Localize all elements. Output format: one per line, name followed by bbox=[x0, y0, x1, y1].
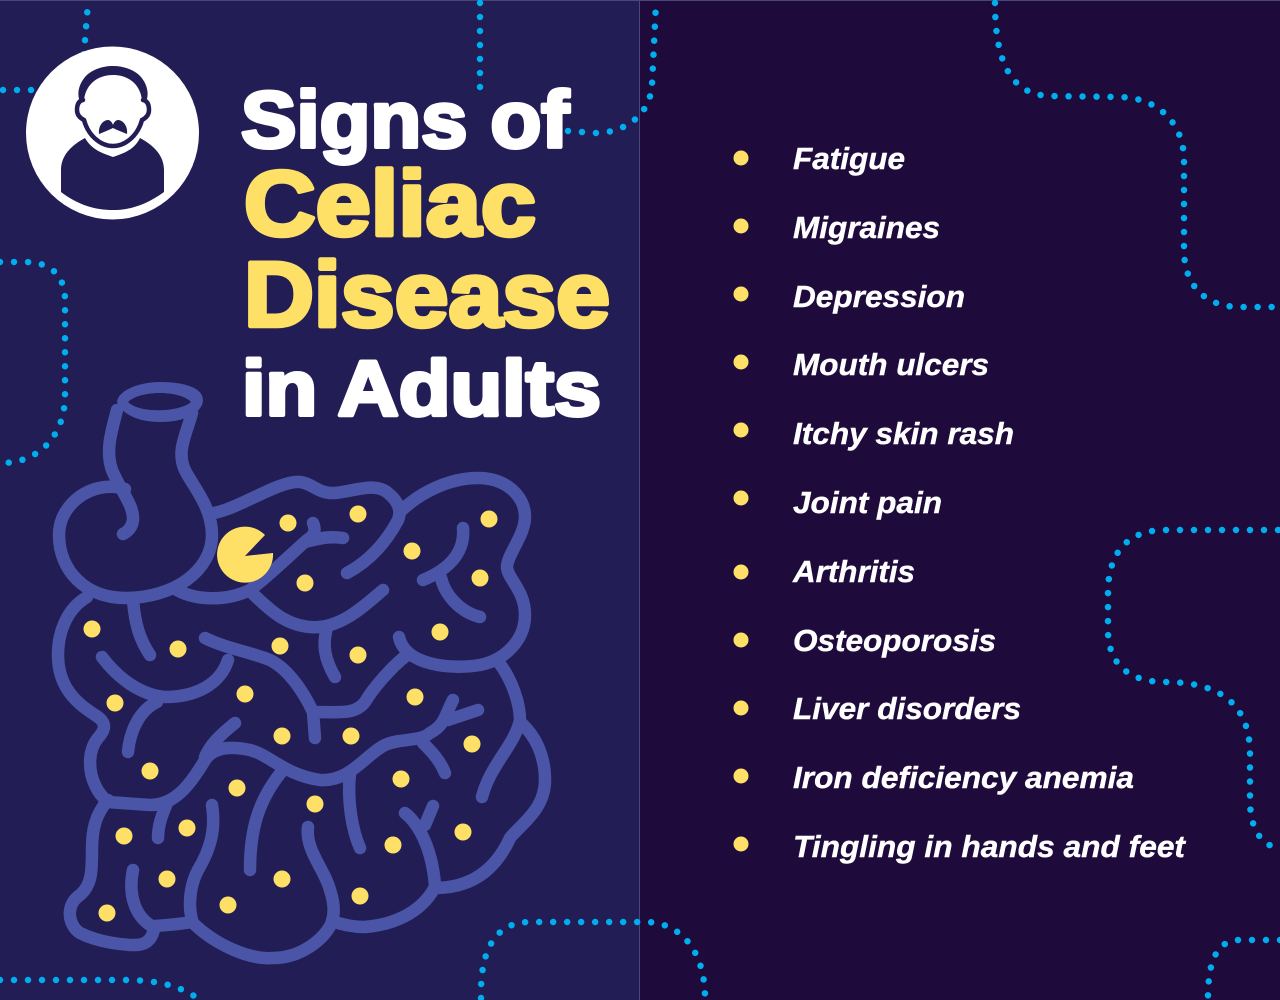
symptom list bbox=[734, 141, 1187, 864]
list item: Osteoporosis bbox=[793, 623, 996, 658]
title line: Disease: Disease bbox=[244, 244, 610, 346]
list bullets bbox=[734, 150, 748, 852]
title line: Signs of: Signs of bbox=[241, 75, 569, 164]
list item: Tingling in hands and feet bbox=[793, 829, 1187, 864]
icon: pac-man bbox=[217, 527, 273, 583]
small intestine loops bbox=[58, 478, 545, 958]
stomach bbox=[59, 382, 212, 598]
icon: face outline bbox=[77, 100, 149, 146]
list item: Depression bbox=[793, 279, 965, 314]
list item: Fatigue bbox=[793, 141, 905, 176]
icon: hair bbox=[78, 66, 148, 101]
title line: Celiac: Celiac bbox=[244, 153, 536, 255]
icon: shoulders bbox=[61, 138, 164, 210]
panel: left background bbox=[0, 0, 640, 1000]
illustration: intestines bbox=[58, 382, 545, 958]
icon: man in circle bbox=[26, 46, 199, 220]
list item: Migraines bbox=[793, 210, 940, 245]
icon: moustache bbox=[99, 120, 127, 134]
list item: Liver disorders bbox=[793, 691, 1021, 726]
list item: Iron deficiency anemia bbox=[793, 760, 1134, 795]
yellow nutrient dots bbox=[84, 506, 498, 922]
title bbox=[241, 75, 610, 432]
panel: right background bbox=[640, 0, 1280, 1000]
list item: Arthritis bbox=[792, 554, 915, 589]
title line: in Adults: in Adults bbox=[242, 344, 601, 432]
list item: Itchy skin rash bbox=[793, 416, 1014, 451]
list item: Joint pain bbox=[793, 485, 942, 520]
list item: Mouth ulcers bbox=[793, 347, 989, 382]
